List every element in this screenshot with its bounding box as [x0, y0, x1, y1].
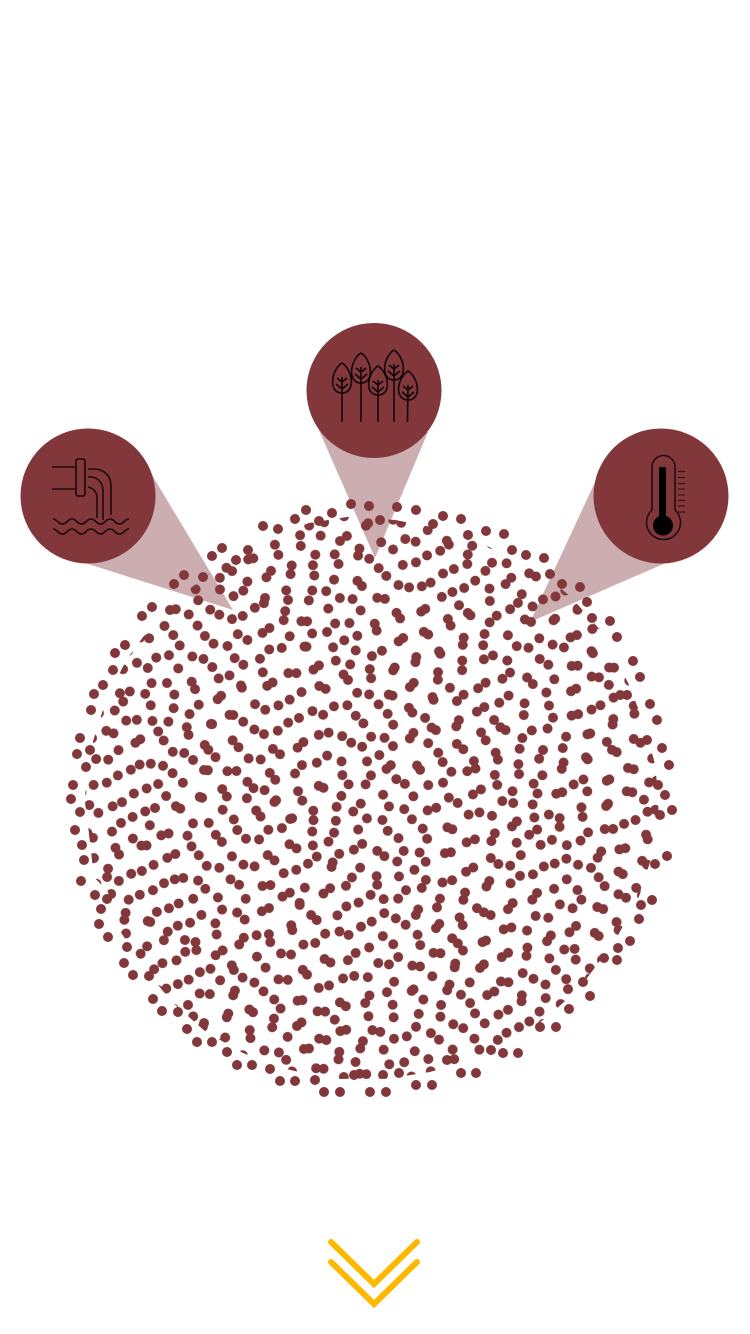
icon: thermometer — [646, 456, 685, 540]
beam: left — [85, 475, 233, 610]
icon: trees — [333, 350, 417, 422]
beam: center — [318, 428, 428, 558]
circle: pipe pollution — [20, 428, 156, 564]
circle: forest — [306, 323, 442, 458]
infographic canvas — [20, 323, 728, 1308]
icon: discharge pipe over water — [52, 459, 129, 534]
dot cloud — [60, 495, 685, 1100]
circle: temperature — [594, 428, 728, 564]
arrow: double chevron down — [331, 1242, 417, 1304]
beam: right — [530, 480, 668, 622]
